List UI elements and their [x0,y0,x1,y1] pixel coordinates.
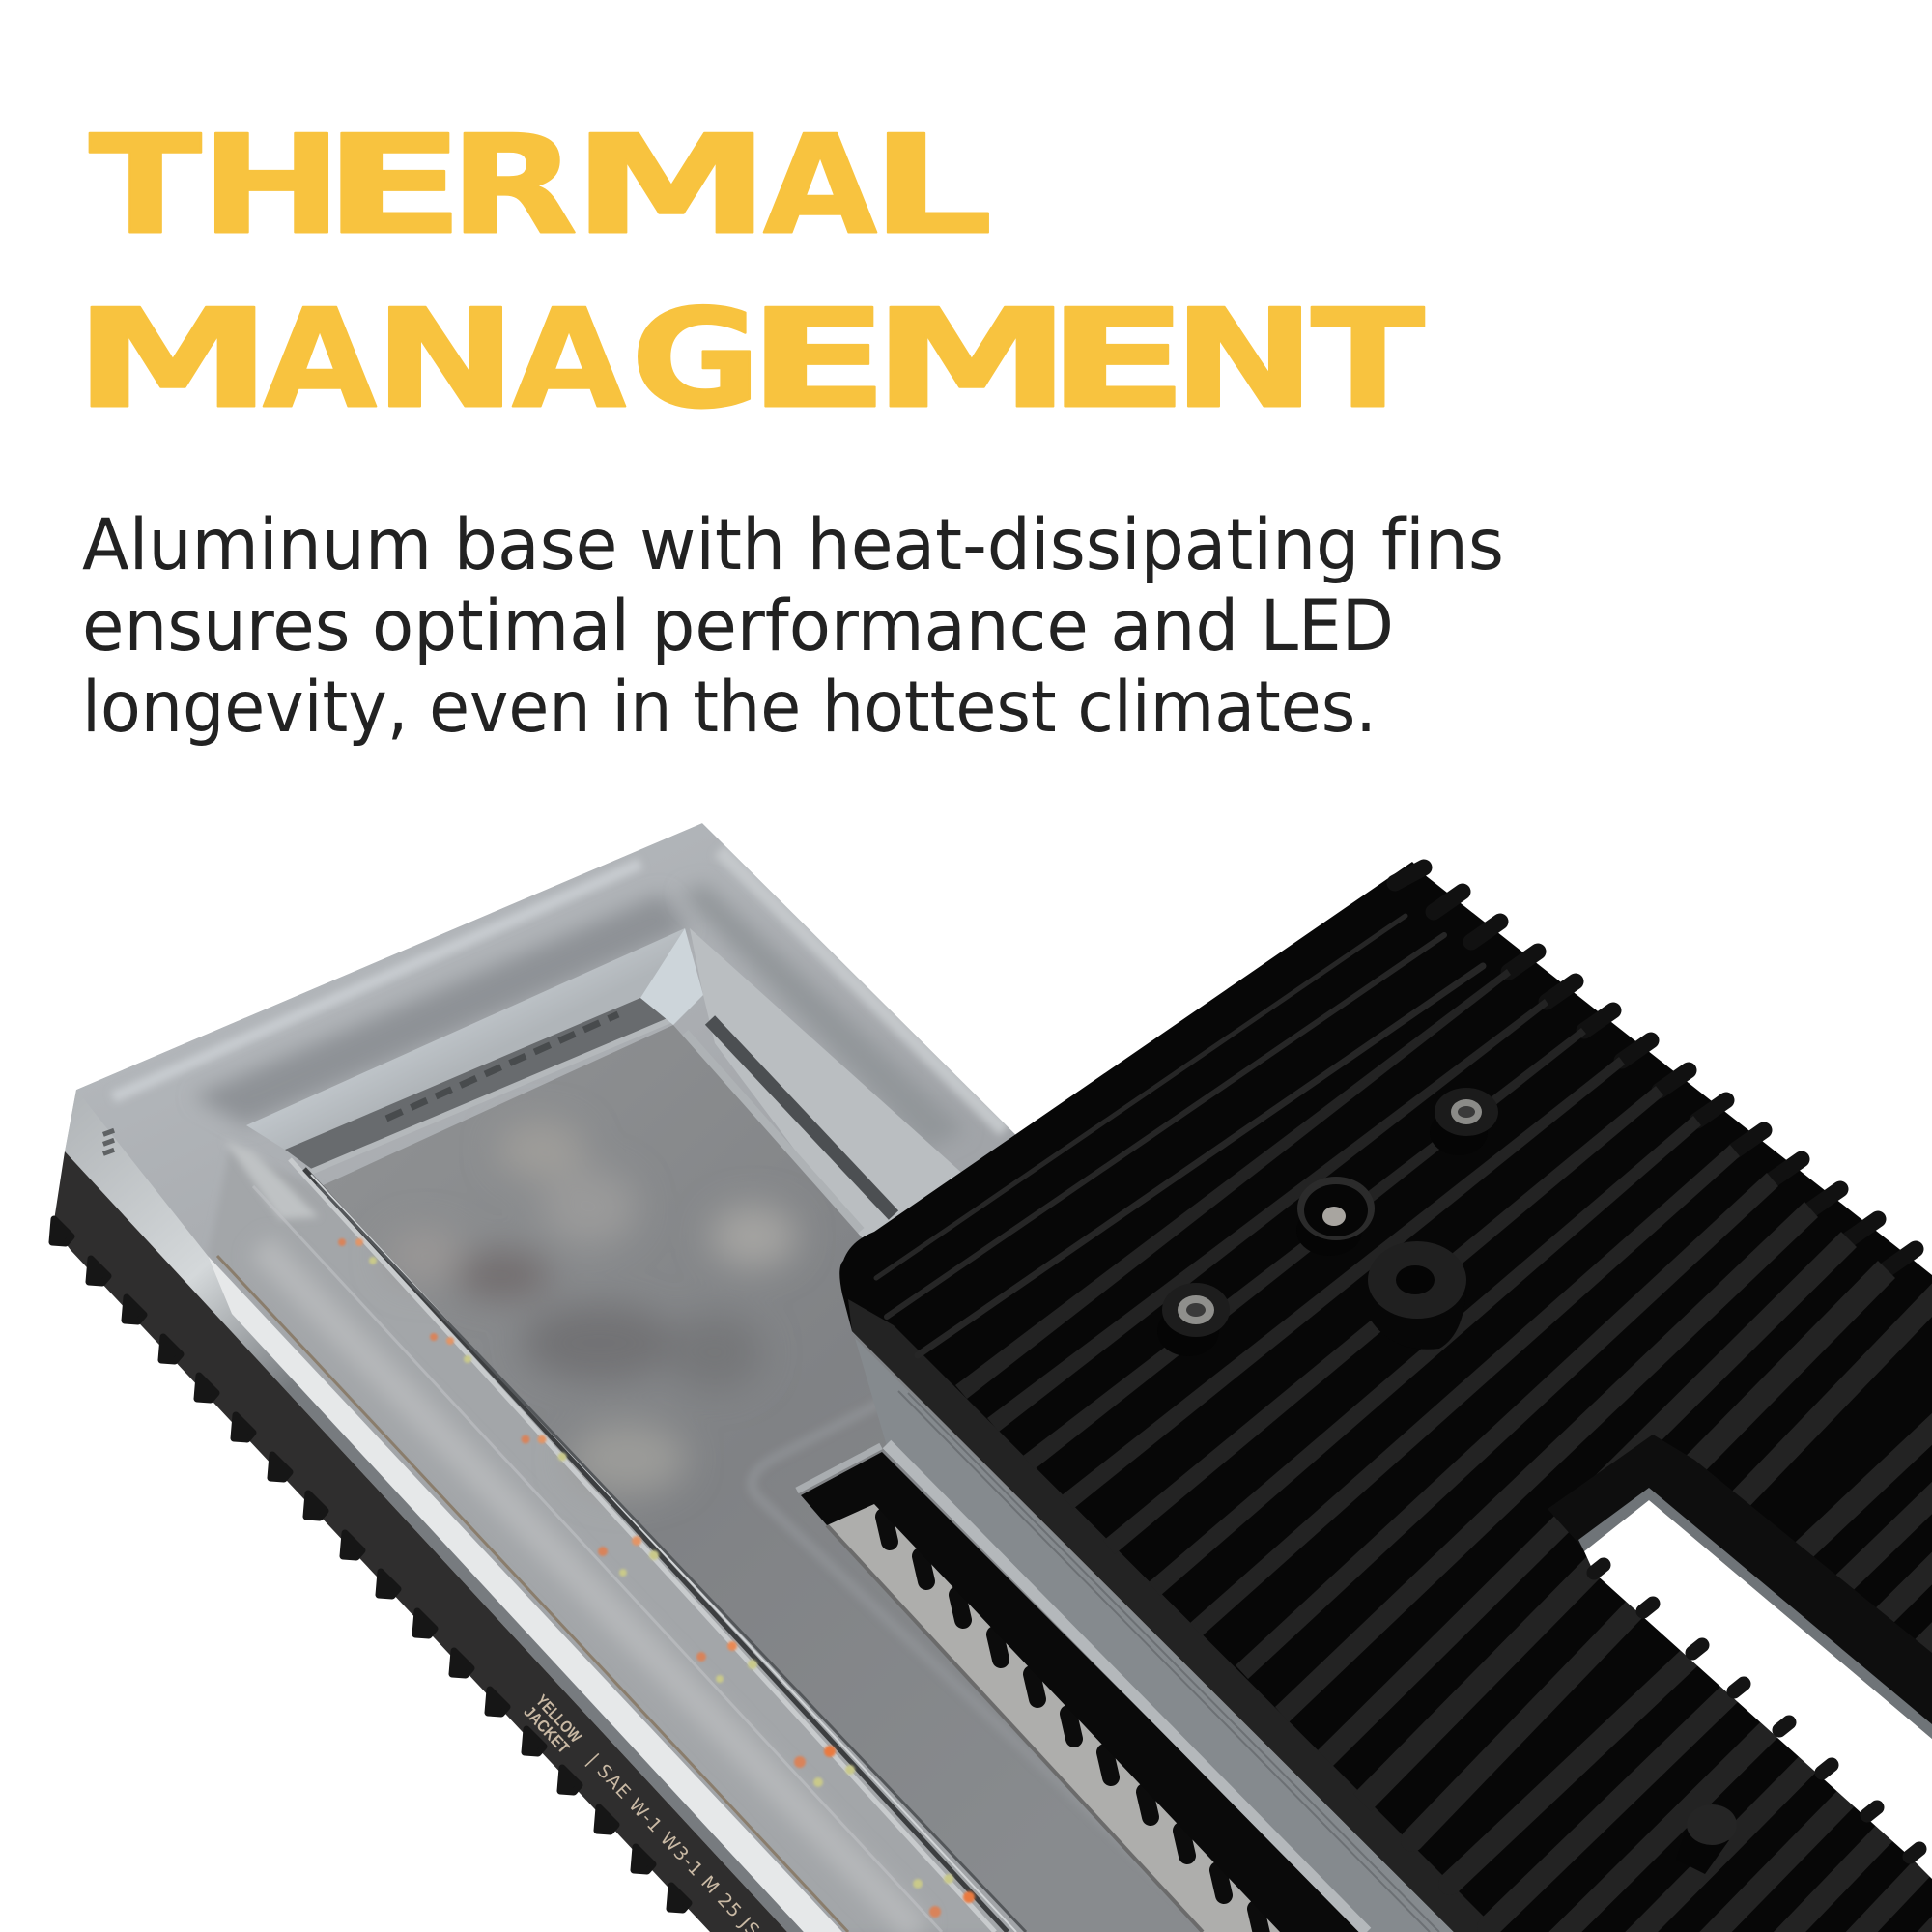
lens outer rim [65,823,1024,1932]
ribbed strip lines [898,1391,1439,1932]
upper thin fin ridges [876,916,1483,1355]
title: M [572,106,771,265]
lens body clipped to outline [65,823,1546,1932]
cutout opening [1584,1500,1932,1879]
cutout gray lens edge [1578,1488,1932,1739]
inner corner nub [230,1144,317,1221]
title: L [870,106,993,265]
title: G [631,280,761,439]
heat sink lit lip [848,1299,1499,1932]
description text: Aluminum base with heat-dissipating fins [82,504,1504,586]
recessed window top bevel [246,928,685,1150]
window floor [827,1504,1280,1932]
title: A [263,280,377,439]
thin inner light lines [311,1014,670,1172]
screw hole left [1157,1283,1230,1356]
brand logo on housing: YELLOW [532,1691,585,1747]
title: M [73,280,272,439]
title: E [1046,280,1189,439]
dark LED reflection stripe [285,998,668,1170]
title: T [89,106,202,265]
title: M [872,280,1071,439]
screw hole right [1430,1088,1498,1155]
title: R [449,106,578,265]
brand logo on housing: JACKET [520,1702,574,1758]
white edge strip [208,1256,842,1932]
window teeth [884,1517,1262,1932]
title: E [323,106,466,265]
photo: clear lens light housing [52,823,1546,1932]
glass edge dark flecks [102,1128,115,1156]
right bright bevel [690,928,966,1256]
title: N [374,280,517,439]
title [73,106,1425,439]
housing fin teeth [52,1219,689,1910]
title: N [1173,280,1316,439]
title: E [747,280,890,439]
light edge strip [887,1444,1367,1932]
frosted band soft light [261,1246,918,1932]
screw hole center [1296,1177,1375,1256]
window lower edge [827,1525,1203,1932]
right inner light line [733,1088,864,1233]
window top rim [797,1446,881,1491]
strip beside window [855,1338,1454,1932]
title: H [200,106,343,265]
LEDs [338,1238,975,1918]
description text [82,504,1504,749]
window shoulder [752,1403,1217,1932]
amber edge line [217,1256,848,1932]
long frosted side band [213,1157,341,1275]
corner mitre [640,928,703,1025]
cutout fin tips [1594,1565,1919,1857]
glass front edge [65,1090,804,1932]
cutout wall [1548,1435,1932,1737]
heat sink base [839,862,1932,1932]
description text: ensures optimal performance and LED [82,585,1394,668]
photo: black heat sink [839,862,1932,1932]
lower heat sink fins [1412,1278,1932,1932]
right dark stripe [710,1020,894,1215]
floor blurred internal shapes [386,1121,797,1493]
LED strip lines [253,1159,1026,1932]
description text: longevity, even in the hottest climates. [82,667,1377,749]
mounting standoff [1368,1241,1466,1350]
locating post [1676,1804,1737,1874]
tapered heat sink fins [955,969,1895,1811]
title: T [1311,280,1425,439]
fin tips [1395,867,1916,1269]
window black band [801,1452,1362,1932]
rim shading bands [113,850,1005,1150]
frosted lens floor [323,1025,1400,1932]
lower housing side [53,1151,787,1932]
title: A [763,106,877,265]
title: A [512,280,626,439]
